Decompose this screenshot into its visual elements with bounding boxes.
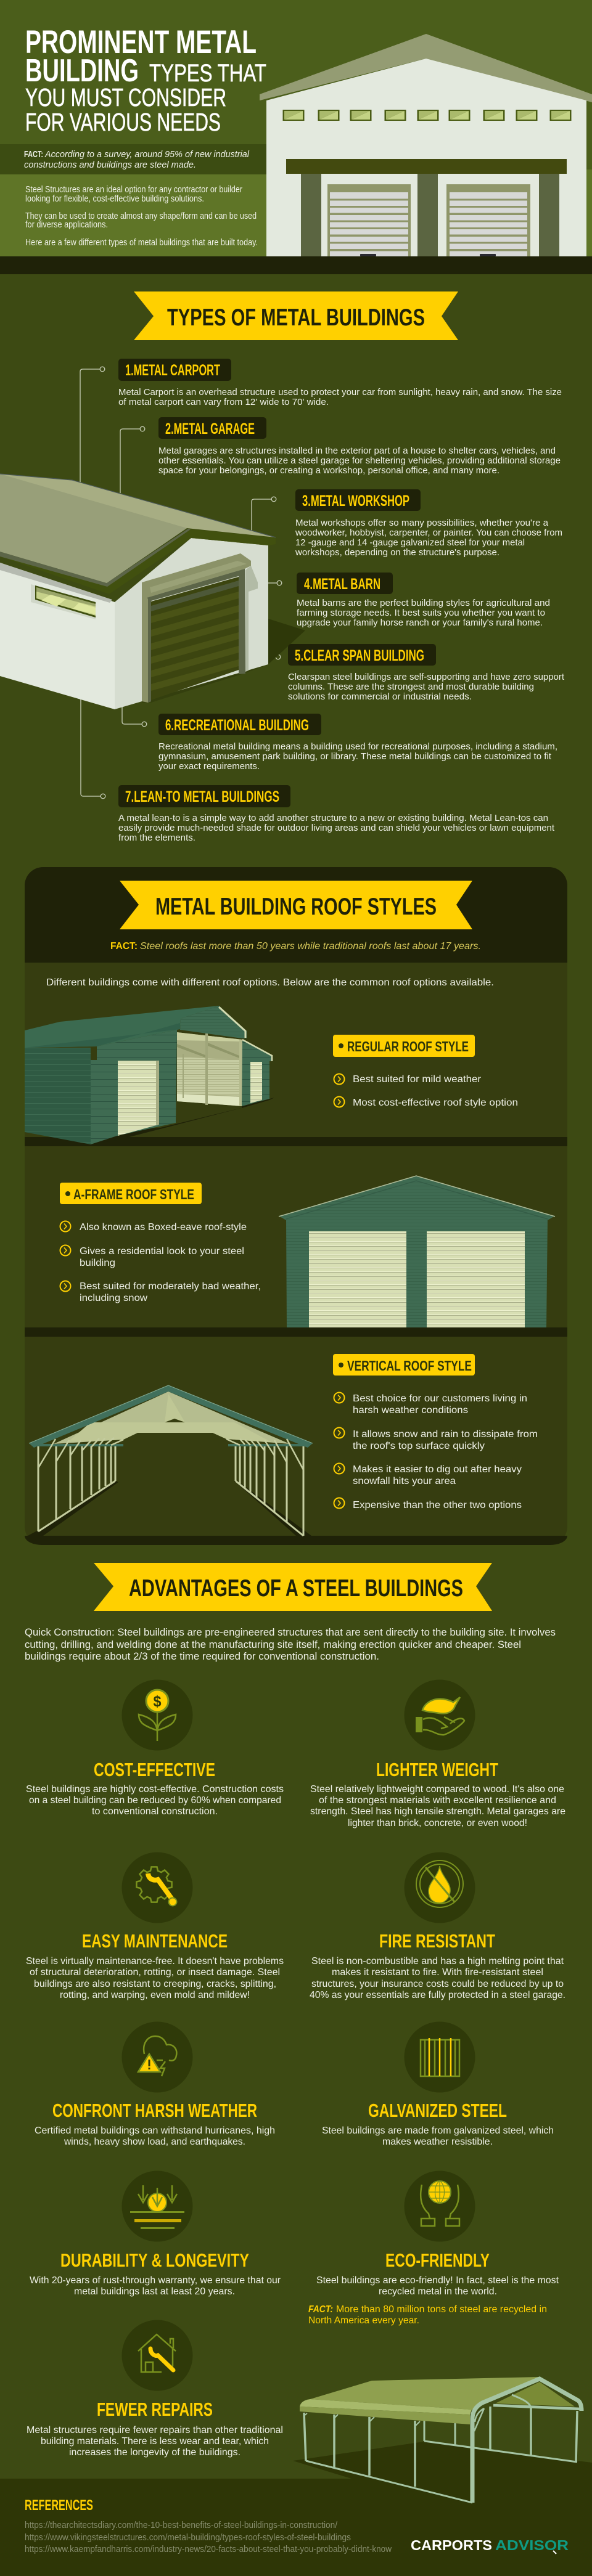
advantage: confront harsh weather: CONFRONT HARSH WEATHER	[52, 2100, 257, 2121]
advantage: fewer repairs: FEWER REPAIRS	[97, 2399, 213, 2420]
fact callout: constructions and buildings are steel made.	[24, 160, 196, 170]
advantage: lighter weight: LIGHTER WEIGHT	[376, 1759, 498, 1780]
item 5: clear span building	[288, 644, 565, 702]
a-frame roof style text: A-FRAME ROOF STYLE	[73, 1186, 194, 1202]
item 7: lean-to metal buildings: easily provide much-needed shade for outdoor living areas and can shield your vehicles or lawn equipment	[118, 823, 555, 833]
illustration: a-frame building	[279, 1176, 555, 1327]
advantage: fire resistant: Steel is non-combustible and has a high melting point that	[311, 1956, 564, 1967]
banner: types of metal buildings: TYPES OF METAL BUILDINGS	[167, 304, 425, 331]
quick construction text: Quick Construction: Steel buildings are pre-engineered structures that are sent directly to the building site. It involves	[25, 1626, 556, 1638]
panel: header	[0, 0, 592, 274]
illustration: warehouse	[260, 34, 592, 256]
advantage: galvanized steel: Steel buildings are made from galvanized steel, which	[322, 2126, 554, 2136]
a-frame roof style text: Best suited for moderately bad weather,	[80, 1281, 261, 1292]
advantage: galvanized steel: GALVANIZED STEEL	[368, 2100, 507, 2121]
advantage: confront harsh weather	[35, 2021, 275, 2147]
advantage: lighter weight	[310, 1680, 565, 1828]
vertical roof style text: Expensive than the other two options	[353, 1500, 522, 1510]
item 3: metal workshop	[295, 489, 562, 558]
advantage: easy maintenance: of structural deterioration, rotting, or insect damage. Steel	[30, 1967, 280, 1978]
regular roof style text: REGULAR ROOF STYLE	[347, 1038, 469, 1054]
roof intro text: Different buildings come with different roof options. Below are the common roof options available.	[46, 977, 494, 988]
advantage: lighter weight: strength. Steel has high tensile strength. Metal garages are	[310, 1806, 565, 1817]
advantage: durability and longevity: DURABILITY & LONGEVITY	[60, 2249, 249, 2271]
garage doors	[327, 184, 530, 256]
intro text: looking for flexible, cost-effective building solutions.	[25, 194, 204, 204]
advantage: durability and longevity: With 20-years of rust-through warranty, we ensure that our	[30, 2275, 281, 2286]
panel: roof styles	[25, 867, 567, 1545]
advantage: eco-friendly: recycled metal in the world.	[379, 2286, 497, 2297]
banner: types of metal buildings	[134, 291, 458, 340]
item 7: lean-to metal buildings: A metal lean-to is a simple way to add another structure to a new or existing building. Metal Lean-tos can	[118, 813, 548, 823]
intro text: Steel Structures are an ideal option for any contractor or builder	[25, 184, 242, 195]
icon: leaf in hand	[405, 1680, 475, 1750]
illustration: regular roof building	[25, 1006, 274, 1144]
item 3: metal workshop: Metal workshops offer so many possibilities, whether you're a	[295, 518, 549, 528]
a-frame roof style text	[60, 1183, 261, 1303]
item 2: metal garage: 2.METAL GARAGE	[165, 420, 255, 438]
a-frame roof style text: building	[80, 1258, 115, 1268]
a-frame roof style text: Also known as Boxed-eave roof-style	[80, 1222, 247, 1233]
advantage: fire resistant: 40% as your essentials are fully protected in a steel garage.	[310, 1990, 565, 2000]
illustration: vertical roof frame	[28, 1385, 313, 1536]
item 3: metal workshop: 12 -gauge and 14 -gauge galvanized steel for your metal	[295, 537, 525, 548]
logo: carports advisor	[411, 2537, 569, 2554]
banner: advantages	[94, 1563, 492, 1611]
vertical roof style text: harsh weather conditions	[353, 1405, 468, 1416]
item 6: recreational building: Recreational metal building means a building used for recreational purposes, including a stadium,	[158, 741, 557, 752]
title	[25, 24, 266, 136]
title: YOU MUST CONSIDER	[25, 83, 226, 112]
vertical roof style text	[333, 1354, 538, 1510]
advantage: fire resistant: structures, your insurance costs could be reduced by up to	[311, 1979, 564, 1989]
a-frame roof style text: Gives a residential look to your steel	[80, 1246, 244, 1257]
item 7: lean-to metal buildings: 7.LEAN-TO METAL BUILDINGS	[125, 788, 279, 805]
illustration: carport	[300, 2377, 582, 2503]
icon: no fire	[405, 1853, 475, 1923]
references: https://www.kaempfandharris.com/industry-news/20-facts-about-steel-that-you-probably-didnt-know	[25, 2544, 392, 2554]
advantage: lighter weight: of the strongest materials with excellent resilience and	[319, 1795, 556, 1806]
item 4: metal barn: upgrade your family horse ranch or your family's rural home.	[297, 618, 543, 628]
vertical roof style text: It allows snow and rain to dissipate from	[353, 1429, 538, 1440]
item 4: metal barn: Metal barns are the perfect building styles for agricultural and	[297, 598, 550, 608]
fact callout: According to a survey, around 95% of new industrial	[44, 149, 250, 160]
advantage: fire resistant: FIRE RESISTANT	[379, 1930, 495, 1952]
vertical roof style text: VERTICAL ROOF STYLE	[347, 1358, 472, 1374]
fact callout: FACT:	[24, 149, 43, 160]
fact: recycling: More than 80 million tons of steel are recycled in	[336, 2304, 547, 2315]
advantage: fewer repairs	[27, 2320, 283, 2458]
icon: money plant: $	[153, 1693, 162, 1710]
logo: carports advisor: ADVISOR	[495, 2537, 569, 2553]
item 3: metal workshop: workshops, depending on the structure's purpose.	[295, 547, 500, 558]
item 2: metal garage: other essentials. You can utilize a steel garage for sheltering vehicles, providing additional storage	[158, 455, 561, 466]
vertical roof style text: Makes it easier to dig out after heavy	[353, 1464, 522, 1475]
vertical roof style text: the roof's top surface quickly	[353, 1441, 485, 1451]
item 5: clear span building: solutions for commercial or industrial needs.	[288, 691, 472, 702]
regular roof style text: Most cost-effective roof style option	[353, 1098, 518, 1108]
icon: gear and wrench	[122, 1853, 192, 1923]
banner: roof styles: METAL BUILDING ROOF STYLES	[155, 894, 437, 920]
intro text: They can be used to create almost any shape/form and can be used	[25, 211, 257, 221]
advantage: lighter weight: lighter than brick, concrete, or even wood!	[348, 1818, 527, 1828]
advantage: fewer repairs: increases the longevity of the buildings.	[69, 2447, 240, 2458]
advantage: fewer repairs: building materials. There is less wear and tear, which	[41, 2436, 269, 2447]
banner: roof styles	[120, 881, 472, 929]
panel: footer	[0, 2442, 592, 2576]
regular roof style text	[333, 1035, 518, 1108]
advantage: fire resistant	[310, 1853, 565, 2000]
fact: recycling: North America every year.	[308, 2315, 419, 2326]
item 4: metal barn	[297, 573, 550, 628]
advantage: confront harsh weather: winds, heavy show load, and earthquakes.	[64, 2137, 245, 2147]
advantage: durability and longevity	[30, 2170, 281, 2297]
advantage: cost-effective	[26, 1680, 284, 1817]
item 2: metal garage: Metal garages are structures installed in the exterior part of a house to shelter cars, vehicles, and	[158, 446, 556, 456]
item 3: metal workshop: 3.METAL WORKSHOP	[302, 492, 409, 510]
title: PROMINENT METAL	[25, 24, 257, 60]
connector lines	[80, 367, 282, 799]
advantage: galvanized steel: makes weather resistible.	[382, 2137, 493, 2147]
windows	[282, 110, 571, 121]
icon: money plant	[122, 1680, 192, 1750]
advantage: easy maintenance	[26, 1853, 284, 2000]
references: https://thearchitectsdiary.com/the-10-best-benefits-of-steel-buildings-in-construction/	[25, 2520, 338, 2530]
icon: arrows on metal	[122, 2170, 192, 2242]
title: FOR VARIOUS NEEDS	[25, 108, 221, 136]
advantage: eco-friendly: ECO-FRIENDLY	[385, 2249, 490, 2271]
advantage: fire resistant: makes it resistant to fire. With fire-resistant steel	[332, 1967, 543, 1978]
item 6: recreational building: 6.RECREATIONAL BUILDING	[165, 717, 309, 734]
item 6: recreational building: gymnasium, amusement park building, or library. These metal buildings can be customized to fit	[158, 751, 552, 762]
references	[25, 2497, 392, 2554]
banner: advantages: ADVANTAGES OF A STEEL BUILDINGS	[129, 1575, 463, 1602]
intro text: for diverse applications.	[25, 219, 108, 230]
item 5: clear span building: Clearspan steel buildings are self-supporting and have zero support	[288, 672, 565, 682]
advantage: cost-effective: on a steel building can be reduced by 60% when compared	[29, 1795, 281, 1806]
fact: roofs: Steel roofs last more than 50 years while traditional roofs last about 17 years.	[140, 941, 481, 952]
fact: recycling: FACT:	[308, 2304, 333, 2315]
title: TYPES THAT	[149, 60, 266, 87]
item 6: recreational building	[158, 714, 557, 772]
advantage: fewer repairs: Metal structures require fewer repairs than other traditional	[27, 2425, 283, 2435]
item 1: metal carport: of metal carport can vary from 12' wide to 70' wide.	[118, 397, 329, 407]
quick construction text: cutting, drilling, and welding done at the manufacturing site itself, making erection quicker and cheaper. Steel	[25, 1639, 521, 1650]
roll-up door	[142, 553, 258, 703]
logo: carports advisor: CARPORTS	[411, 2537, 492, 2553]
item 3: metal workshop: woodworker, hobbyist, carpenter, or painter. You can choose from	[295, 528, 562, 538]
fact: roofs: FACT:	[110, 941, 138, 952]
side window	[31, 584, 96, 619]
item 2: metal garage: space for your belongings, or creating a workshop, personal office, and many more.	[158, 465, 500, 476]
intro text	[25, 184, 258, 248]
item 5: clear span building: columns. These are the strongest and most durable building	[288, 682, 534, 692]
advantage: cost-effective: Steel buildings are highly cost-effective. Construction costs	[26, 1784, 284, 1795]
intro text: Here are a few different types of metal buildings that are built today.	[25, 237, 258, 248]
illustration: isometric metal building	[0, 474, 305, 709]
vertical roof style text: snowfall hits your area	[353, 1476, 456, 1486]
fact: recycling	[308, 2304, 547, 2326]
advantage: confront harsh weather: Certified metal buildings can withstand hurricanes, high	[35, 2126, 275, 2136]
icon: corrugated sheet	[405, 2021, 475, 2093]
item 4: metal barn: farming storage needs. It best suits you whether you want to	[297, 608, 545, 618]
item 7: lean-to metal buildings: from the elements.	[118, 833, 195, 843]
advantage: easy maintenance: Steel is virtually maintenance-free. It doesn't have problems	[26, 1956, 284, 1967]
item 1: metal carport: Metal Carport is an overhead structure used to protect your car from sunlight, heavy rain, and snow. The size	[118, 387, 562, 397]
icon: house and wrench	[122, 2320, 192, 2391]
advantage: cost-effective: to conventional construction.	[92, 1806, 218, 1817]
item 5: clear span building: 5.CLEAR SPAN BUILDING	[295, 647, 424, 664]
icon: globe in hands	[405, 2170, 475, 2242]
regular roof style text: Best suited for mild weather	[353, 1074, 482, 1085]
item 7: lean-to metal buildings	[118, 785, 555, 843]
quick construction text	[25, 1626, 556, 1662]
advantage: galvanized steel	[322, 2021, 554, 2147]
advantage: lighter weight: Steel relatively lightweight compared to wood. It's also one	[310, 1784, 564, 1795]
advantage: durability and longevity: metal buildings last at least 20 years.	[74, 2286, 235, 2297]
a-frame roof style text: including snow	[80, 1293, 147, 1303]
quick construction text: buildings require about 2/3 of the time required for conventional construction.	[25, 1650, 379, 1662]
advantage: cost-effective: COST-EFFECTIVE	[94, 1759, 215, 1780]
icon: storm warning	[122, 2021, 192, 2093]
item 6: recreational building: your exact requirements.	[158, 761, 260, 772]
fact callout	[24, 149, 250, 170]
advantage: easy maintenance: buildings are also resistant to creeping, cracks, splitting,	[34, 1979, 276, 1989]
references: https://www.vikingsteelstructures.com/metal-building/types-roof-styles-of-steel-buildings	[25, 2532, 351, 2543]
advantage: eco-friendly: Steel buildings are eco-friendly! In fact, steel is the most	[316, 2275, 559, 2286]
item 2: metal garage	[158, 417, 561, 476]
advantage: easy maintenance: EASY MAINTENANCE	[82, 1930, 228, 1952]
vertical roof style text: Best choice for our customers living in	[353, 1393, 527, 1404]
references: REFERENCES	[25, 2497, 93, 2514]
item 1: metal carport: 1.METAL CARPORT	[125, 362, 220, 379]
title: BUILDING	[25, 53, 139, 89]
item 1: metal carport	[118, 359, 562, 407]
advantage: easy maintenance: rotting, and warping, even mold and mildew!	[60, 1990, 250, 2000]
advantage: eco-friendly	[308, 2170, 559, 2326]
item 4: metal barn: 4.METAL BARN	[304, 576, 380, 593]
